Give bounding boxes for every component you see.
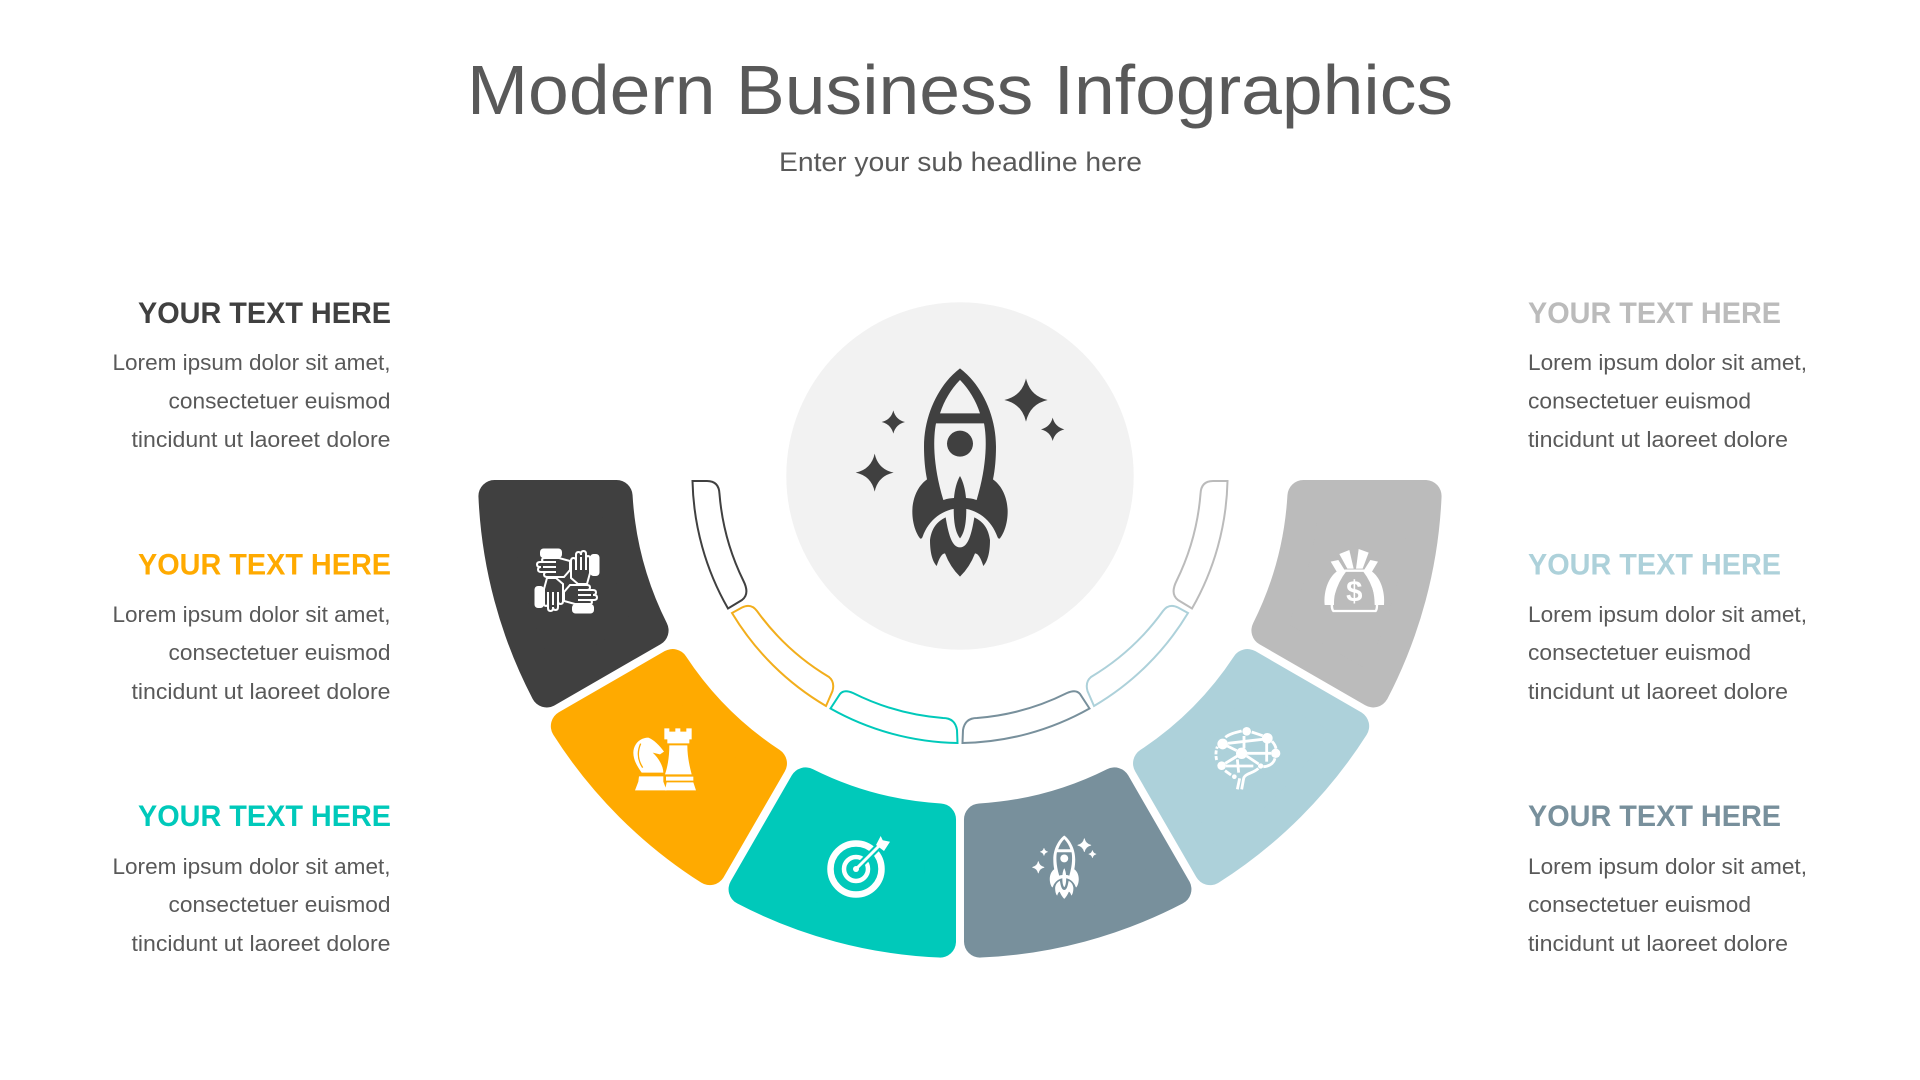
panel: light blue segment — [1149, 665, 1353, 869]
body text: tincidunt ut laoreet dolore — [1528, 931, 1788, 956]
body text: consectetuer euismod — [1528, 388, 1751, 414]
icon: chess knight and rook — [633, 728, 696, 790]
body text: consectetuer euismod — [168, 388, 390, 414]
icon: money bag: $ — [1346, 575, 1362, 608]
panel: orange segment — [567, 665, 771, 869]
body text: Lorem ipsum dolor sit amet, — [1528, 350, 1807, 375]
panel: right text 1 — [1528, 297, 1807, 452]
body text: tincidunt ut laoreet dolore — [1528, 427, 1788, 452]
outline segment: dark — [692, 481, 746, 608]
body text: tincidunt ut laoreet dolore — [1528, 679, 1788, 704]
body text: Lorem ipsum dolor sit amet, — [112, 602, 390, 627]
body text: tincidunt ut laoreet dolore — [132, 427, 390, 452]
panel: right text 3 — [1528, 800, 1807, 956]
panel: slate segment — [980, 783, 1175, 942]
heading: YOUR TEXT HERE — [138, 297, 391, 330]
body text: tincidunt ut laoreet dolore — [132, 679, 390, 704]
body text: consectetuer euismod — [168, 892, 390, 917]
heading: YOUR TEXT HERE — [1528, 548, 1781, 582]
body text: Lorem ipsum dolor sit amet, — [112, 854, 390, 879]
body text — [112, 350, 390, 452]
outline segment: slate — [962, 691, 1090, 743]
icon: money bag — [1324, 549, 1384, 611]
body text: consectetuer euismod — [1528, 892, 1751, 917]
body text — [1528, 854, 1807, 956]
outline segment: gray — [1174, 481, 1228, 608]
subtitle: Enter your sub headline here — [779, 147, 1142, 177]
icon: large rocket with stars — [856, 368, 1064, 577]
panel: dark segment — [494, 496, 653, 691]
body text: Lorem ipsum dolor sit amet, — [112, 350, 390, 375]
body text: consectetuer euismod — [1528, 640, 1751, 665]
center circle — [786, 302, 1134, 650]
icon: small rocket with stars — [1033, 836, 1096, 899]
panel: right text 2 — [1528, 548, 1807, 704]
panel: gray segment — [1267, 496, 1426, 691]
heading: YOUR TEXT HERE — [138, 800, 391, 833]
body text: tincidunt ut laoreet dolore — [132, 931, 390, 956]
outline segment: orange — [732, 606, 833, 706]
body text: Lorem ipsum dolor sit amet, — [1528, 854, 1807, 879]
outline segment: teal — [830, 691, 958, 743]
panel: left text 2 — [112, 548, 391, 704]
body text — [1528, 350, 1807, 452]
panel: left text 1 — [112, 297, 391, 452]
heading: YOUR TEXT HERE — [1528, 297, 1781, 330]
body text — [112, 602, 390, 704]
icon: target with arrow — [830, 836, 890, 894]
outline segment: light blue — [1087, 606, 1188, 706]
panel: teal segment — [745, 783, 940, 942]
body text: Lorem ipsum dolor sit amet, — [1528, 602, 1807, 627]
body text — [112, 854, 390, 956]
heading: YOUR TEXT HERE — [138, 548, 391, 582]
heading: YOUR TEXT HERE — [1528, 800, 1781, 833]
body text: consectetuer euismod — [168, 640, 390, 665]
title: Modern Business Infographics — [467, 51, 1453, 129]
icon: brain network — [1216, 727, 1280, 789]
icon: four joined hands — [536, 550, 598, 612]
body text — [1528, 602, 1807, 704]
panel: left text 3 — [112, 800, 391, 956]
